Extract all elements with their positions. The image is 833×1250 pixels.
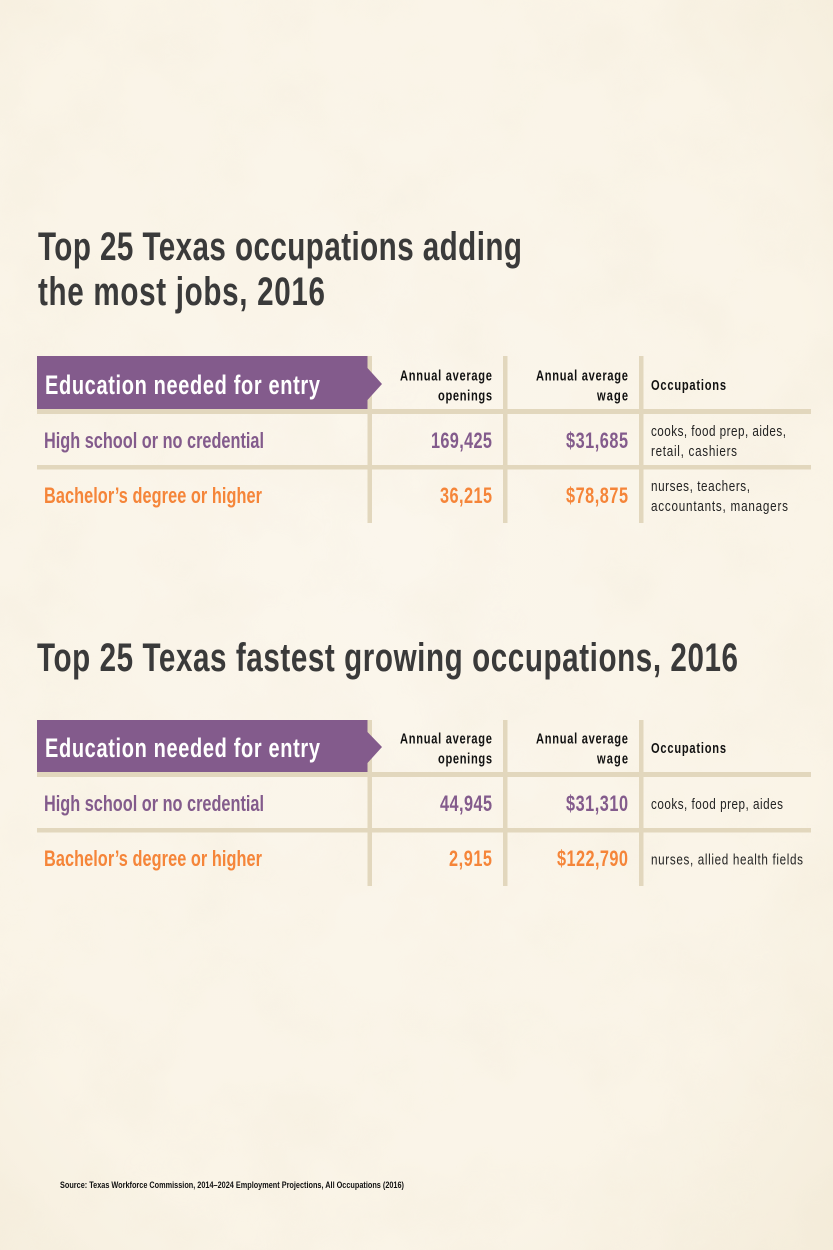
table: fastest growing occupations [37, 720, 811, 886]
row: bachelor's degree or higher [44, 847, 803, 872]
source note: Source: Texas Workforce Commission, 2014–2024 Employment Projections, All Occupations (2016) [60, 1180, 404, 1191]
header band: education needed for entry: Education needed for entry [45, 370, 321, 401]
column headers: Occupations [651, 376, 726, 393]
column headers: openings [438, 387, 492, 404]
row: high school or no credential: High school or no credential [44, 429, 264, 454]
column headers: wage [596, 387, 628, 404]
column headers: wage [596, 750, 628, 767]
header band: education needed for entry: Education needed for entry [45, 733, 321, 764]
row: bachelor's degree or higher: nurses, allied health fields [651, 851, 803, 868]
row: high school or no credential: High school or no credential [44, 792, 264, 817]
row: bachelor's degree or higher [44, 478, 788, 514]
row: high school or no credential: 44,945 [440, 792, 492, 817]
row: bachelor's degree or higher: 36,215 [440, 484, 492, 509]
column headers: Annual average [536, 367, 628, 384]
row: high school or no credential: cooks, food prep, aides [651, 796, 783, 812]
column headers: Occupations [651, 739, 726, 756]
row: bachelor's degree or higher: accountants, managers [651, 498, 788, 514]
row: high school or no credential: 169,425 [431, 429, 492, 454]
row: bachelor's degree or higher: $78,875 [566, 484, 628, 509]
row: high school or no credential: cooks, food prep, aides, [651, 423, 786, 439]
row: bachelor's degree or higher: nurses, teachers, [651, 478, 750, 494]
title: occupations adding the most jobs: the most jobs, 2016 [38, 270, 325, 314]
row: bachelor's degree or higher: Bachelor’s degree or higher [44, 484, 262, 509]
column headers: openings [438, 750, 492, 767]
table: occupations adding the most jobs [37, 356, 811, 523]
column headers: Annual average [400, 730, 492, 747]
column headers [400, 730, 726, 767]
title: fastest growing occupations: Top 25 Texas fastest growing occupations, 2016 [37, 636, 738, 680]
row: bachelor's degree or higher: Bachelor’s degree or higher [44, 847, 262, 872]
title: occupations adding the most jobs [38, 225, 522, 314]
row: high school or no credential: $31,310 [566, 792, 628, 817]
title: occupations adding the most jobs: Top 25 Texas occupations adding [38, 225, 522, 269]
header band: education needed for entry [37, 356, 382, 409]
header band: education needed for entry [37, 720, 382, 772]
column headers [400, 367, 726, 404]
column headers: Annual average [536, 730, 628, 747]
row: high school or no credential: retail, cashiers [651, 443, 737, 459]
column headers: Annual average [400, 367, 492, 384]
row: bachelor's degree or higher: $122,790 [557, 847, 628, 872]
row: high school or no credential: $31,685 [566, 429, 628, 454]
row: bachelor's degree or higher: 2,915 [449, 847, 492, 872]
row: high school or no credential [44, 423, 786, 459]
row: high school or no credential [44, 792, 783, 817]
